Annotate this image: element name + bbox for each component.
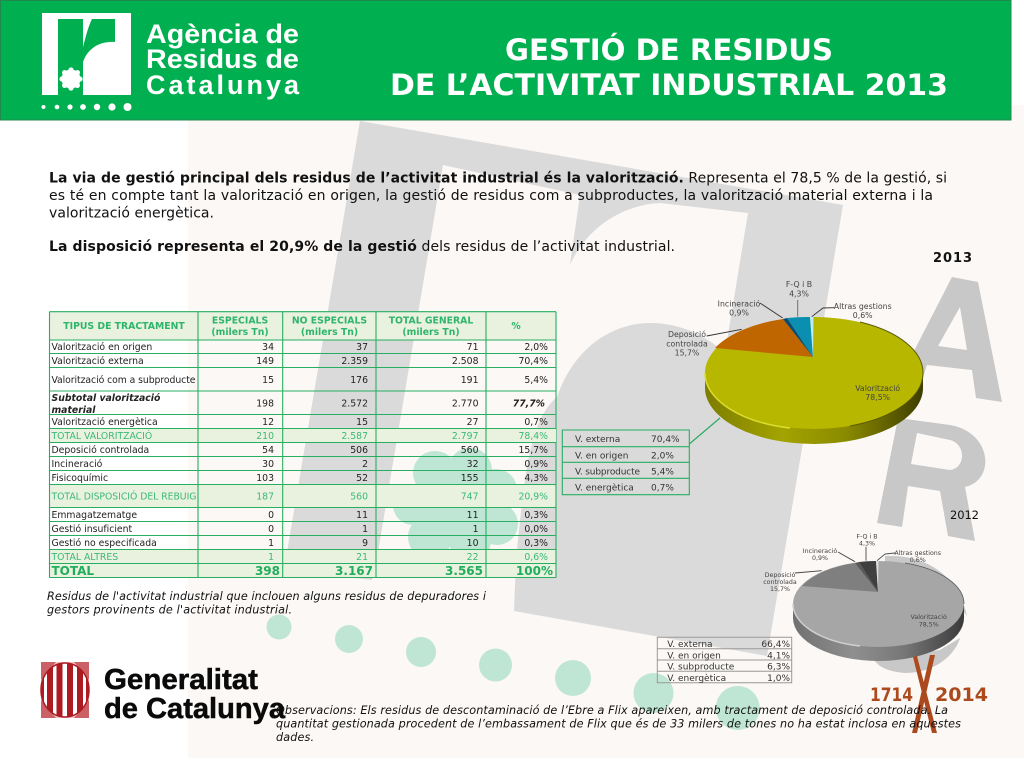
row: Gestió insuficient — [52, 524, 548, 535]
pie side 2012 — [793, 604, 964, 661]
sector: Altres gestions — [810, 317, 814, 357]
watermark: letter R — [877, 418, 985, 541]
pie labels 2013: Deposició — [668, 330, 706, 339]
row: Gestió insuficient: 0,0% — [524, 524, 548, 535]
row: Valorització en origen: 37 — [356, 342, 368, 353]
row: Valorització en origen: 2,0% — [524, 342, 548, 353]
row: TOTAL DISPOSICIÓ DEL REBUIG — [50, 490, 548, 502]
logo: 1714 / 2014 — [870, 655, 988, 733]
row: Fisicoquímic: 155 — [461, 473, 479, 484]
pie labels 2012: Valorització — [911, 613, 947, 621]
breakdown table 2012: V. energètica — [667, 673, 726, 684]
breakdown table 2012 — [657, 637, 792, 684]
row: TOTAL ALTRES — [50, 552, 548, 563]
row: Valorització energètica — [52, 417, 548, 428]
row: Subtotal valorització material: Subtotal valorització — [52, 393, 161, 404]
row: Gestió insuficient: 0 — [268, 524, 274, 535]
row: Valorització com a subproducte: 5,4% — [524, 375, 548, 386]
row: Valorització com a subproducte: 191 — [461, 375, 479, 386]
row: Incineració: 2 — [362, 459, 368, 470]
pie labels 2012: F-Q i B — [856, 534, 878, 540]
logo: 1714 / 2014: 2014 — [935, 684, 988, 706]
row: TOTAL DISPOSICIÓ DEL REBUIG: 747 — [461, 492, 479, 502]
watermark: flower — [393, 448, 518, 562]
table header: ESPECIALS — [212, 316, 268, 326]
pie labels 2012: Altras gestions — [894, 550, 941, 557]
pie labels 2013: Incineració — [718, 300, 761, 308]
row: TOTAL DISPOSICIÓ DEL REBUIG: 20,9% — [518, 492, 548, 502]
row: Incineració: 32 — [467, 459, 478, 470]
row: TOTAL VALORITZACIÓ: 2.797 — [452, 431, 479, 442]
title: GESTIÓ DE RESIDUS — [505, 33, 833, 67]
row: TOTAL — [52, 564, 553, 578]
row: Valorització externa: Valorització externa — [52, 356, 144, 367]
watermark: letter C — [874, 556, 967, 673]
breakdown table 2012: V. externa — [667, 640, 713, 650]
row: Valorització com a subproducte: 176 — [350, 375, 368, 386]
intro text: La via de gestió principal dels residus de l’activitat industrial és la valorització. Representa el 78,5 % de la gestió, si — [49, 170, 947, 186]
table header: TIPUS DE TRACTAMENT — [63, 321, 185, 332]
logo: Generalitat de Catalunya: de Catalunya — [104, 693, 286, 725]
row: Gestió no especificada: 9 — [362, 538, 368, 549]
table header: NO ESPECIALS — [292, 316, 367, 326]
observations note: Observacions: Els residus de descontaminació de l’Ebre a Flix apareixen, amb tractament de deposició controlada. La — [276, 704, 948, 717]
header band — [0, 0, 1011, 120]
row: Deposició controlada: Deposició controlada — [52, 445, 149, 456]
sector: Deposició controlada 2012 — [802, 563, 878, 592]
row: Incineració — [52, 459, 548, 470]
row: Valorització com a subproducte — [52, 375, 548, 386]
row: Valorització energètica: 0,7% — [524, 417, 548, 428]
title — [390, 33, 948, 102]
logo: Agència de Residus: Residus de — [146, 44, 299, 74]
table header: % — [511, 321, 521, 332]
row: Valorització externa — [52, 356, 548, 367]
emblem — [41, 662, 89, 718]
row: Deposició controlada — [52, 445, 548, 456]
table header: (milers Tn) — [211, 327, 269, 338]
logo: Agència de Residus — [42, 13, 300, 111]
table footnote — [47, 590, 487, 616]
pie chart 2013 — [666, 280, 923, 444]
observations note — [276, 704, 961, 744]
sector: Incineració — [783, 318, 813, 357]
row: Valorització energètica: 12 — [262, 417, 274, 428]
logo: 1714 / 2014: 1714 — [870, 684, 913, 706]
row: Emmagatzematge: 11 — [467, 510, 479, 521]
row: Deposició controlada: 506 — [350, 445, 368, 456]
breakdown table 2013: V. energètica — [575, 482, 634, 494]
year label 2013: 2013 — [933, 251, 972, 266]
row: Fisicoquímic: 4,3% — [524, 473, 548, 484]
row: TOTAL VALORITZACIÓ: 210 — [256, 431, 274, 442]
row: Valorització energètica: 27 — [467, 417, 479, 428]
sector: Deposició controlada — [715, 319, 813, 357]
watermark: dots — [266, 614, 760, 730]
row: Valorització com a subproducte: 15 — [262, 375, 274, 386]
pie labels 2012: 4,3% — [859, 540, 875, 548]
row: TOTAL VALORITZACIÓ: 2.587 — [341, 431, 368, 442]
row: Gestió insuficient: 1 — [362, 524, 368, 535]
table fills — [50, 312, 556, 578]
pie top 2013 — [705, 317, 923, 429]
row: Emmagatzematge — [52, 510, 548, 521]
row: Gestió no especificada — [52, 538, 548, 549]
row: TOTAL ALTRES: 22 — [467, 552, 478, 563]
row: Valorització externa: 70,4% — [518, 356, 548, 367]
row: Gestió no especificada: 1 — [268, 538, 274, 549]
pie labels 2013: Altras gestions — [834, 302, 892, 311]
table footnote: gestors provinents de l'activitat industrial. — [47, 604, 292, 616]
sector: F-Q i B — [787, 317, 813, 357]
row: Fisicoquímic: Fisicoquímic — [52, 473, 108, 484]
breakdown table 2013: V. en origen — [575, 452, 628, 462]
row: Subtotal valorització material: 2.770 — [452, 398, 479, 410]
sector: Altres gestions 2012 — [876, 561, 878, 592]
sector: Incineració 2012 — [855, 562, 878, 592]
row: Valorització externa: 2.508 — [452, 356, 479, 367]
pie labels 2012: Incineració — [803, 547, 837, 555]
breakdown table 2012: 4,1% — [767, 651, 790, 661]
row: Emmagatzematge: Emmagatzematge — [52, 510, 137, 521]
pie labels 2012: 0,6% — [910, 557, 926, 564]
year label 2012: 2012 — [950, 508, 979, 522]
row: TOTAL DISPOSICIÓ DEL REBUIG: 187 — [256, 492, 274, 502]
row: Gestió no especificada: Gestió no especificada — [52, 538, 157, 549]
pie labels 2013: 0,6% — [853, 311, 873, 320]
pie labels 2012: controlada — [763, 579, 797, 586]
row: Valorització externa: 2.359 — [341, 356, 368, 367]
pie labels 2012: Deposició — [765, 571, 795, 579]
row: Valorització en origen: Valorització en origen — [52, 342, 152, 353]
breakdown table 2012: 66,4% — [761, 640, 790, 650]
row: TOTAL: 3.167 — [335, 564, 373, 578]
intro text — [49, 170, 947, 255]
breakdown table 2012: 1,0% — [767, 674, 790, 684]
intro text: valorització energètica. — [49, 206, 214, 222]
row: Deposició controlada: 560 — [461, 445, 479, 456]
row: Gestió no especificada: 0,3% — [524, 538, 548, 549]
intro text: La disposició representa el 20,9% de la gestió dels residus de l’activitat industrial. — [49, 239, 675, 255]
breakdown table 2013: V. externa — [575, 435, 620, 445]
row: TOTAL: 100% — [516, 564, 553, 578]
breakdown table 2013: 2,0% — [651, 452, 674, 462]
title: DE L’ACTIVITAT INDUSTRIAL 2013 — [390, 68, 948, 102]
pie top 2012 — [793, 561, 964, 647]
pie labels 2013: 4,3% — [789, 290, 809, 298]
intro text: es té en compte tant la valorització en origen, la gestió de residus com a subproductes, la valorització material externa i la — [49, 188, 933, 204]
row: Emmagatzematge: 0 — [268, 510, 274, 521]
pie labels 2012: 15,7% — [770, 586, 790, 593]
sector: F-Q i B 2012 — [859, 561, 878, 592]
row: TOTAL ALTRES: 0,6% — [524, 552, 548, 563]
observations note: quantitat gestionada procedent de l’embassament de Flix que és de 33 milers de tones no ha estat inclosa en aquestes — [276, 718, 961, 730]
pie labels 2012 — [763, 534, 947, 628]
breakdown table 2012: V. en origen — [667, 651, 721, 661]
pie labels 2013 — [666, 280, 900, 402]
row: TOTAL VALORITZACIÓ: 78,4% — [518, 431, 548, 442]
row: Incineració: Incineració — [52, 459, 103, 470]
row: TOTAL ALTRES: 1 — [268, 552, 274, 563]
connector from pie to breakdown — [689, 418, 720, 444]
pie labels 2012: 0,9% — [812, 555, 828, 562]
row: TOTAL ALTRES: 21 — [356, 552, 368, 563]
row: TOTAL VALORITZACIÓ — [50, 429, 556, 442]
row: Deposició controlada: 15,7% — [518, 445, 548, 456]
data table — [50, 312, 556, 578]
row: Valorització energètica: 15 — [356, 417, 368, 428]
row: Subtotal valorització material: 198 — [256, 398, 274, 410]
logo: Agència de Residus: Catalunya — [146, 70, 300, 100]
watermark: letter A — [895, 277, 1002, 402]
row: TOTAL VALORITZACIÓ: TOTAL VALORITZACIÓ — [50, 430, 152, 442]
table header: (milers Tn) — [402, 327, 460, 338]
row: Valorització com a subproducte: Valorització com a subproducte — [52, 375, 196, 386]
row: TOTAL: TOTAL — [52, 564, 94, 578]
pie chart 2012 — [763, 534, 964, 661]
row: TOTAL DISPOSICIÓ DEL REBUIG: 560 — [350, 492, 368, 502]
row: Fisicoquímic: 103 — [256, 473, 274, 484]
row: Valorització energètica: Valorització energètica — [52, 417, 158, 428]
row: Fisicoquímic: 52 — [356, 473, 368, 484]
row: Gestió no especificada: 10 — [467, 538, 479, 549]
row: Subtotal valorització material: 2.572 — [341, 398, 368, 410]
breakdown table 2013 — [562, 430, 689, 495]
page background — [188, 105, 1024, 758]
row: TOTAL: 3.565 — [445, 564, 483, 578]
pie labels 2013: 78,5% — [865, 393, 890, 402]
row: Valorització en origen: 71 — [467, 342, 479, 353]
table header: (milers Tn) — [301, 327, 358, 338]
row: Emmagatzematge: 11 — [356, 510, 368, 521]
pie side 2013 — [705, 373, 923, 444]
row: Valorització en origen — [52, 342, 548, 353]
pie labels 2013: F-Q i B — [786, 280, 812, 289]
logo: Agència de Residus: Agència de — [146, 19, 299, 49]
pie labels 2013: Valorització — [855, 384, 900, 393]
row: TOTAL ALTRES: TOTAL ALTRES — [50, 552, 118, 563]
row: Valorització externa: 149 — [256, 356, 274, 367]
breakdown table 2013: 70,4% — [651, 435, 680, 445]
breakdown table 2012: 6,3% — [767, 663, 790, 673]
row: Subtotal valorització material: 77,7% — [513, 398, 545, 410]
row: Subtotal valorització material: material — [52, 405, 96, 416]
pie labels 2013: 15,7% — [675, 348, 699, 358]
logo: Generalitat de Catalunya — [41, 662, 286, 725]
table header — [63, 316, 521, 338]
row: Fisicoquímic — [52, 473, 548, 484]
pie leader lines 2012 — [795, 547, 895, 573]
row: TOTAL: 398 — [255, 564, 280, 578]
row: Deposició controlada: 54 — [262, 445, 274, 456]
pie labels 2013: 0,9% — [729, 308, 749, 318]
pie leader lines 2013 — [707, 300, 834, 336]
table header: TOTAL GENERAL — [389, 316, 473, 326]
row: Gestió insuficient: 1 — [473, 524, 479, 535]
breakdown table 2012: V. subproducte — [667, 663, 735, 673]
table footnote: Residus de l'activitat industrial que inclouen alguns residus de depuradores i — [47, 590, 487, 603]
row: Incineració: 30 — [262, 459, 274, 470]
row: Incineració: 0,9% — [524, 459, 548, 470]
breakdown table 2013: V. subproducte — [575, 468, 640, 478]
logo: Generalitat de Catalunya: Generalitat — [104, 664, 258, 696]
watermark: large r — [284, 121, 843, 656]
row: Emmagatzematge: 0,3% — [524, 510, 548, 521]
pie labels 2012: 78,5% — [919, 622, 939, 628]
observations note: dades. — [276, 731, 314, 744]
breakdown table 2013: 0,7% — [651, 484, 674, 494]
row: Valorització en origen: 34 — [262, 342, 274, 353]
table grid — [50, 312, 556, 578]
row: Gestió insuficient: Gestió insuficient — [52, 524, 133, 535]
row: Subtotal valorització material — [52, 393, 545, 416]
pie labels 2013: controlada — [666, 340, 708, 348]
row: TOTAL DISPOSICIÓ DEL REBUIG: TOTAL DISPOSICIÓ DEL REBUIG — [50, 490, 196, 502]
breakdown table 2013: 5,4% — [651, 468, 674, 478]
